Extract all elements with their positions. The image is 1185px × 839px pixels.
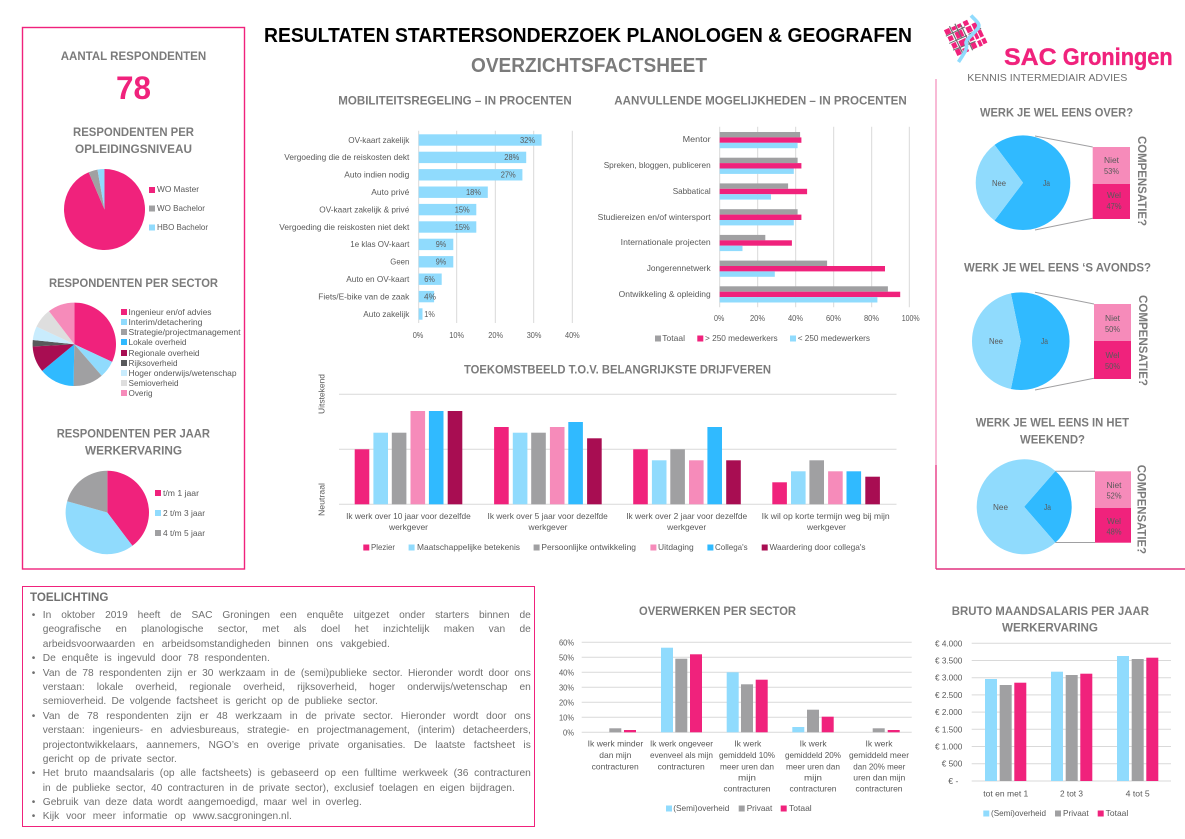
bar chart: bruto maandsalaris: € 2.000 [935,707,963,717]
legend: werkervaring: t/m 1 jaar [163,488,199,498]
logo wordmark: Groningen [1063,44,1173,71]
legend: toekomstbeeld: Uitdaging [658,542,694,552]
legend: opleidingsniveau: HBO Bachelor [157,222,208,232]
text block: toelichting bullets: Kijk voor meer informatie op www.sacgroningen.nl. [43,811,292,822]
logo wordmark: SAC [1004,44,1057,71]
bar chart: bruto maandsalaris: € 1.500 [935,724,963,734]
legend: sector: Lokale overheid [128,337,187,347]
bar chart: mobiliteitsregeling: Auto privé [371,187,410,197]
heading: werk je wel eens in het weekend: WERK JE WEL EENS IN HET [976,416,1130,430]
heading: per opleidingsniveau: RESPONDENTEN PER [73,125,194,139]
legend: sector: Hoger onderwijs/wetenschap [128,368,237,378]
pie chart: over with compensation: Ja [1043,178,1050,188]
bar chart: aanvullende mogelijkheden: 20% [750,313,765,323]
text block: toelichting bullets: semioverheid. De volgende factsheet is gericht op de publieke sector. [43,696,378,707]
legend: aanvullende mogelijkheden: < 250 medewerkers [798,333,870,343]
bar chart: toekomstbeeld: werkgever [666,522,706,532]
pie chart: over with compensation [976,135,1130,230]
bar chart: bruto maandsalaris: € - [948,776,959,786]
bar chart: mobiliteitsregeling: Auto indien nodig [344,170,410,180]
bar chart: aanvullende mogelijkheden: Internationale projecten [621,237,711,247]
bar chart: mobiliteitsregeling: 30% [527,330,542,340]
bar chart: bruto maandsalaris: tot en met 1 [983,788,1029,798]
text block: toelichting bullets: • [32,653,35,664]
bar chart: overwerken per sector: Ik werk minder [588,738,643,748]
bar chart: bruto maandsalaris: 2 tot 3 [1060,788,1083,798]
legend: sector: Rijksoverheid [128,358,178,368]
legend: aanvullende mogelijkheden: > 250 medewerkers [705,333,778,343]
legend: sector: Ingenieur en/of advies [128,307,212,317]
pie chart: avonds with compensation: 50% [1105,324,1120,334]
bar chart: mobiliteitsregeling: 40% [565,330,580,340]
bar chart: mobiliteitsregeling: 27% [501,170,516,180]
heading: werk je wel eens over: WERK JE WEL EENS OVER? [980,106,1133,120]
text block: toelichting bullets: • [32,811,35,822]
legend: sector: Regionale overheid [128,348,200,358]
bar chart: aanvullende mogelijkheden: Mentor [683,134,711,144]
bar chart: mobiliteitsregeling: Vergoeding die reiskosten niet dekt [279,222,410,232]
legend: toekomstbeeld: Collega's [715,542,748,552]
bar chart: toekomstbeeld: werkgever [806,522,846,532]
pie chart: weekend with compensation [977,459,1131,554]
bar chart: overwerken per sector [559,637,912,813]
number: 78 respondents: 78 [116,70,151,106]
bar chart: overwerken per sector: dan 20% meer [853,761,905,771]
heading: mobiliteitsregeling: MOBILITEITSREGELING – IN PROCENTEN [338,94,572,108]
text block: toelichting bullets: gericht op de private sector. [43,754,177,765]
bar chart: bruto maandsalaris: € 1.000 [935,742,963,752]
bar chart: bruto maandsalaris: € 2.500 [935,690,963,700]
panel: overwerken rechts [936,79,1185,569]
bar chart: mobiliteitsregeling: Auto en OV-kaart [346,274,410,284]
text block: toelichting bullets: Van de 78 respondenten zijn er 48 werkzaam in de private sector. Hieronder wordt door ons [43,711,531,722]
pie chart: avonds with compensation: Ja [1041,336,1048,346]
heading: werk je wel eens in het weekend: WEEKEND? [1020,432,1085,446]
bar chart: overwerken per sector: gemiddeld meer [849,750,909,760]
pie chart: avonds with compensation: Nee [989,336,1003,346]
pie chart: weekend with compensation: 52% [1106,491,1122,501]
heading: werk je wel eens in het weekend [976,416,1130,446]
heading: per jaar werkervaring: WERKERVARING [85,443,182,457]
heading: toekomstbeeld: TOEKOMSTBEELD T.O.V. BELANGRIJKSTE DRIJFVEREN [464,362,771,376]
bar chart: mobiliteitsregeling [279,131,580,340]
text block: toelichting bullets: • [32,797,35,808]
bar chart: mobiliteitsregeling: 32% [520,135,535,145]
legend: opleidingsniveau [149,184,208,232]
bar chart: bruto maandsalaris: € 4.000 [935,638,963,648]
panel: respondents [22,28,244,569]
heading: per jaar werkervaring [57,427,210,457]
legend: sector: Strategie/projectmanagement [128,327,241,337]
logo: SAC Groningen [943,14,1173,84]
bar chart: overwerken per sector: contracturen [790,783,837,793]
bar chart: aanvullende mogelijkheden: Jongerennetwerk [647,263,712,273]
legend: bruto maandsalaris [983,808,1128,818]
bar chart: mobiliteitsregeling: 18% [466,187,481,197]
heading: per opleidingsniveau [73,125,194,156]
bar chart: mobiliteitsregeling: 15% [455,222,470,232]
pie chart: over with compensation: Nee [992,178,1006,188]
text block: toelichting bullets: Gebruik van deze data wordt aangemoedigd, maar wel in overleg. [43,797,362,808]
text block: toelichting bullets: verstaan: lokale overheid, regionale overheid, rijksoverheid, hoger onderwijs/wetenschap en [43,682,531,693]
axis label: neutraal: Neutraal [316,483,326,516]
bar chart: mobiliteitsregeling: OV-kaart zakelijk [348,135,410,145]
legend: overwerken: Privaat [747,803,773,813]
bar chart: overwerken per sector: evenveel als mijn [650,750,713,760]
bar chart: mobiliteitsregeling: 15% [455,204,470,214]
pie chart: opleidingsniveau [64,169,145,250]
heading: bruto maandsalaris [952,604,1149,635]
title: RESULTATEN STARTERSONDERZOEK PLANOLOGEN & GEOGRAFEN [264,25,912,47]
legend: werkervaring [155,488,205,538]
legend: sector: Interim/detachering [128,317,203,327]
bar chart: mobiliteitsregeling: 1e klas OV-kaart [350,239,410,249]
bar chart: toekomstbeeld: Ik werk over 2 jaar voor dezelfde [626,511,748,521]
bar chart: bruto maandsalaris: € 3.000 [935,673,963,683]
text block: toelichting bullets: • [32,711,35,722]
bar chart: overwerken per sector: 20% [559,697,574,707]
legend: werkervaring: 2 t/m 3 jaar [163,508,205,518]
bar chart: mobiliteitsregeling: 10% [449,330,464,340]
label: compensatie 1: COMPENSATIE? [1135,136,1149,226]
panel: toelichting [22,586,535,827]
bar chart: overwerken per sector: dan mijn [599,750,632,760]
legend: sector: Overig [128,388,153,398]
legend: aanvullende mogelijkheden: Totaal [662,333,685,343]
bar chart: overwerken per sector: meer uren dan [786,761,840,771]
legend: bruto maandsalaris: Totaal [1106,808,1128,818]
bar chart: aanvullende mogelijkheden [598,127,920,343]
heading: werk je wel eens 's avonds: WERK JE WEL EENS ‘S AVONDS? [964,261,1151,275]
text block: toelichting bullets: Van de 78 respondenten zijn er 30 werkzaam in de (semi)publieke sector. Hieronder wordt door ons [43,668,531,679]
bar chart: overwerken per sector: gemiddeld 20% [785,750,842,760]
bar chart: aanvullende mogelijkheden: 60% [826,313,841,323]
pie chart: weekend with compensation: 48% [1106,527,1122,537]
bar chart: aanvullende mogelijkheden: 100% [902,313,920,323]
logo wordmark [1004,44,1173,71]
label: compensatie 3: COMPENSATIE? [1134,465,1148,554]
bar chart: overwerken per sector: contracturen [592,761,639,771]
bar chart: toekomstbeeld [316,374,896,552]
heading: toelichting: TOELICHTING [30,591,108,604]
text block: toelichting bullets: arbeidsvoorwaarden en arbeidsomstandigheden binnen ons vakgebied. [43,639,390,650]
bar chart: mobiliteitsregeling: 6% [424,274,435,284]
bar chart: bruto maandsalaris [935,638,1171,818]
text block: toelichting bullets: • [32,668,35,679]
bar chart: aanvullende mogelijkheden: Ontwikkeling & opleiding [619,289,711,299]
bar chart: mobiliteitsregeling: 20% [488,330,503,340]
pie chart: weekend with compensation: Niet [1106,480,1122,490]
bar chart: aanvullende mogelijkheden: 0% [714,313,725,323]
bar chart: aanvullende mogelijkheden: Spreken, bloggen, publiceren [604,160,711,170]
legend: overwerken [666,803,812,813]
bar chart: mobiliteitsregeling: Vergoeding die de reiskosten dekt [284,152,410,162]
bar chart: overwerken per sector: gemiddeld 10% [719,750,776,760]
pie chart: weekend with compensation: Wel [1107,516,1121,526]
text block: toelichting bullets: verstaan: ingenieurs- en adviesbureaus, strategie- en projectmanagement, (interim) detacheerders, [43,725,531,736]
legend: toekomstbeeld: Waardering door collega's [770,542,866,552]
pie chart: werkervaring [66,471,149,554]
text block: toelichting bullets: projectontwikkelaars, aannemers, NGO’s en overige private organisaties. De laatste factsheet is [43,740,531,751]
text block: toelichting bullets: • [32,768,35,779]
heading: aanvullende mogelijkheden: AANVULLENDE MOGELIJKHEDEN – IN PROCENTEN [614,94,907,108]
bar chart: mobiliteitsregeling: Auto zakelijk [363,309,410,319]
bar chart: overwerken per sector: mijn [804,772,822,782]
legend: toekomstbeeld: Maatschappelijke betekenis [417,542,520,552]
pie chart: avonds with compensation: Wel [1106,350,1120,360]
legend: aanvullende mogelijkheden [655,333,870,343]
legend: opleidingsniveau: WO Master [157,184,199,194]
heading: per opleidingsniveau: OPLEIDINGSNIVEAU [75,142,192,156]
bar chart: mobiliteitsregeling: Geen [390,257,410,267]
legend: bruto maandsalaris: Privaat [1063,808,1089,818]
legend: overwerken: Totaal [789,803,812,813]
legend: sector [121,307,241,398]
bar chart: mobiliteitsregeling: OV-kaart zakelijk & privé [319,204,410,214]
bar chart: overwerken per sector: Ik werk [734,738,762,748]
bar chart: overwerken per sector: contracturen [724,783,771,793]
pie chart: avonds with compensation: 50% [1105,361,1120,371]
bar chart: mobiliteitsregeling: 9% [436,257,447,267]
bar chart: toekomstbeeld: Ik wil op korte termijn weg bij mijn [762,511,890,521]
bar chart: overwerken per sector: 50% [559,652,574,662]
bar chart: overwerken per sector: Ik werk [800,738,828,748]
bar chart: overwerken per sector: uren dan mijn [853,772,906,782]
logo tagline: KENNIS INTERMEDIAIR ADVIES [967,73,1128,84]
bar chart: overwerken per sector: mijn [738,772,756,782]
pie chart: avonds with compensation: Niet [1105,313,1121,323]
bar chart: overwerken per sector: 0% [563,727,574,737]
bar chart: aanvullende mogelijkheden: Sabbatical [673,186,711,196]
legend: overwerken: (Semi)overheid [673,803,730,813]
bar chart: toekomstbeeld: werkgever [527,522,568,532]
icon: city map [943,14,988,62]
pie chart: over with compensation: Wel [1107,190,1121,200]
text block: toelichting bullets: in de publieke sector, 40 contracturen in de private sector), exclusief toelagen en eigen bijdragen. [43,783,515,794]
label: compensatie 2: COMPENSATIE? [1136,295,1150,386]
pie chart: over with compensation: 53% [1104,166,1119,176]
text block: toelichting bullets: De enquête is ingevuld door 78 respondenten. [43,653,270,664]
bar chart: toekomstbeeld: werkgever [388,522,428,532]
pie chart: over with compensation: 47% [1106,201,1122,211]
bar chart: toekomstbeeld: Ik werk over 10 jaar voor dezelfde [346,511,471,521]
bar chart: bruto maandsalaris: € 3.500 [935,656,963,666]
heading: overwerken per sector: OVERWERKEN PER SECTOR [639,604,796,618]
text block: toelichting bullets [32,610,531,822]
text block: toelichting bullets: geografische en planologische sector, met als doel het inzichtelijk maken van de [43,624,531,635]
bar chart: mobiliteitsregeling: 9% [436,239,447,249]
heading: bruto maandsalaris: WERKERVARING [1002,621,1098,635]
heading: per sector: RESPONDENTEN PER SECTOR [49,276,218,290]
bar chart: overwerken per sector: 40% [559,667,574,677]
bar chart: aanvullende mogelijkheden: 80% [864,313,879,323]
pie chart: sector [33,303,116,386]
bar chart: aanvullende mogelijkheden: 40% [788,313,803,323]
text block: toelichting bullets: • [32,610,35,621]
bar chart: aanvullende mogelijkheden: Studiereizen en/of wintersport [598,212,711,222]
bar chart: overwerken per sector: Ik werk [866,738,893,748]
heading: aantal respondenten: AANTAL RESPONDENTEN [61,49,206,63]
subtitle: OVERZICHTSFACTSHEET [471,55,707,77]
legend: toekomstbeeld [363,542,866,552]
bar chart: overwerken per sector: Ik werk ongeveer [650,738,713,748]
bar chart: bruto maandsalaris: € 500 [942,759,963,769]
pie chart: over with compensation: Niet [1104,155,1120,165]
heading: per jaar werkervaring: RESPONDENTEN PER JAAR [57,427,210,441]
legend: werkervaring: 4 t/m 5 jaar [163,528,205,538]
text block: toelichting bullets: Het bruto maandsalaris (op alle factsheets) is gebaseerd op een fulltime werkweek (36 contracturen [43,768,531,779]
bar chart: overwerken per sector: 30% [559,682,574,692]
bar chart: overwerken per sector: contracturen [658,761,705,771]
bar chart: toekomstbeeld: Ik werk over 5 jaar voor dezelfde [488,511,608,521]
legend: toekomstbeeld: Plezier [371,542,395,552]
text block: toelichting bullets: In oktober 2019 heeft de SAC Groningen een enquête uitgezet onder starters binnen de [43,610,531,621]
legend: sector: Semioverheid [128,378,179,388]
bar chart: mobiliteitsregeling: 28% [504,152,520,162]
pie chart: avonds with compensation [972,292,1131,390]
bar chart: overwerken per sector: 60% [559,637,574,647]
legend: toekomstbeeld: Persoonlijke ontwikkeling [541,542,636,552]
bar chart: mobiliteitsregeling: 0% [413,330,424,340]
legend: opleidingsniveau: WO Bachelor [157,203,205,213]
bar chart: overwerken per sector: contracturen [856,783,903,793]
pie chart: weekend with compensation: Ja [1044,502,1051,512]
bar chart: overwerken per sector: 10% [559,712,574,722]
bar chart: mobiliteitsregeling: 4% [424,291,437,301]
pie chart: weekend with compensation: Nee [993,502,1008,512]
bar chart: mobiliteitsregeling: Fiets/E-bike van de zaak [318,291,410,301]
heading: bruto maandsalaris: BRUTO MAANDSALARIS PER JAAR [952,604,1149,618]
bar chart: overwerken per sector: meer uren dan [720,761,774,771]
legend: bruto maandsalaris: (Semi)overheid [991,808,1046,818]
bar chart: mobiliteitsregeling: 1% [424,309,435,319]
bar chart: bruto maandsalaris: 4 tot 5 [1126,788,1150,798]
axis label: uitstekend: Uitstekend [316,374,326,414]
